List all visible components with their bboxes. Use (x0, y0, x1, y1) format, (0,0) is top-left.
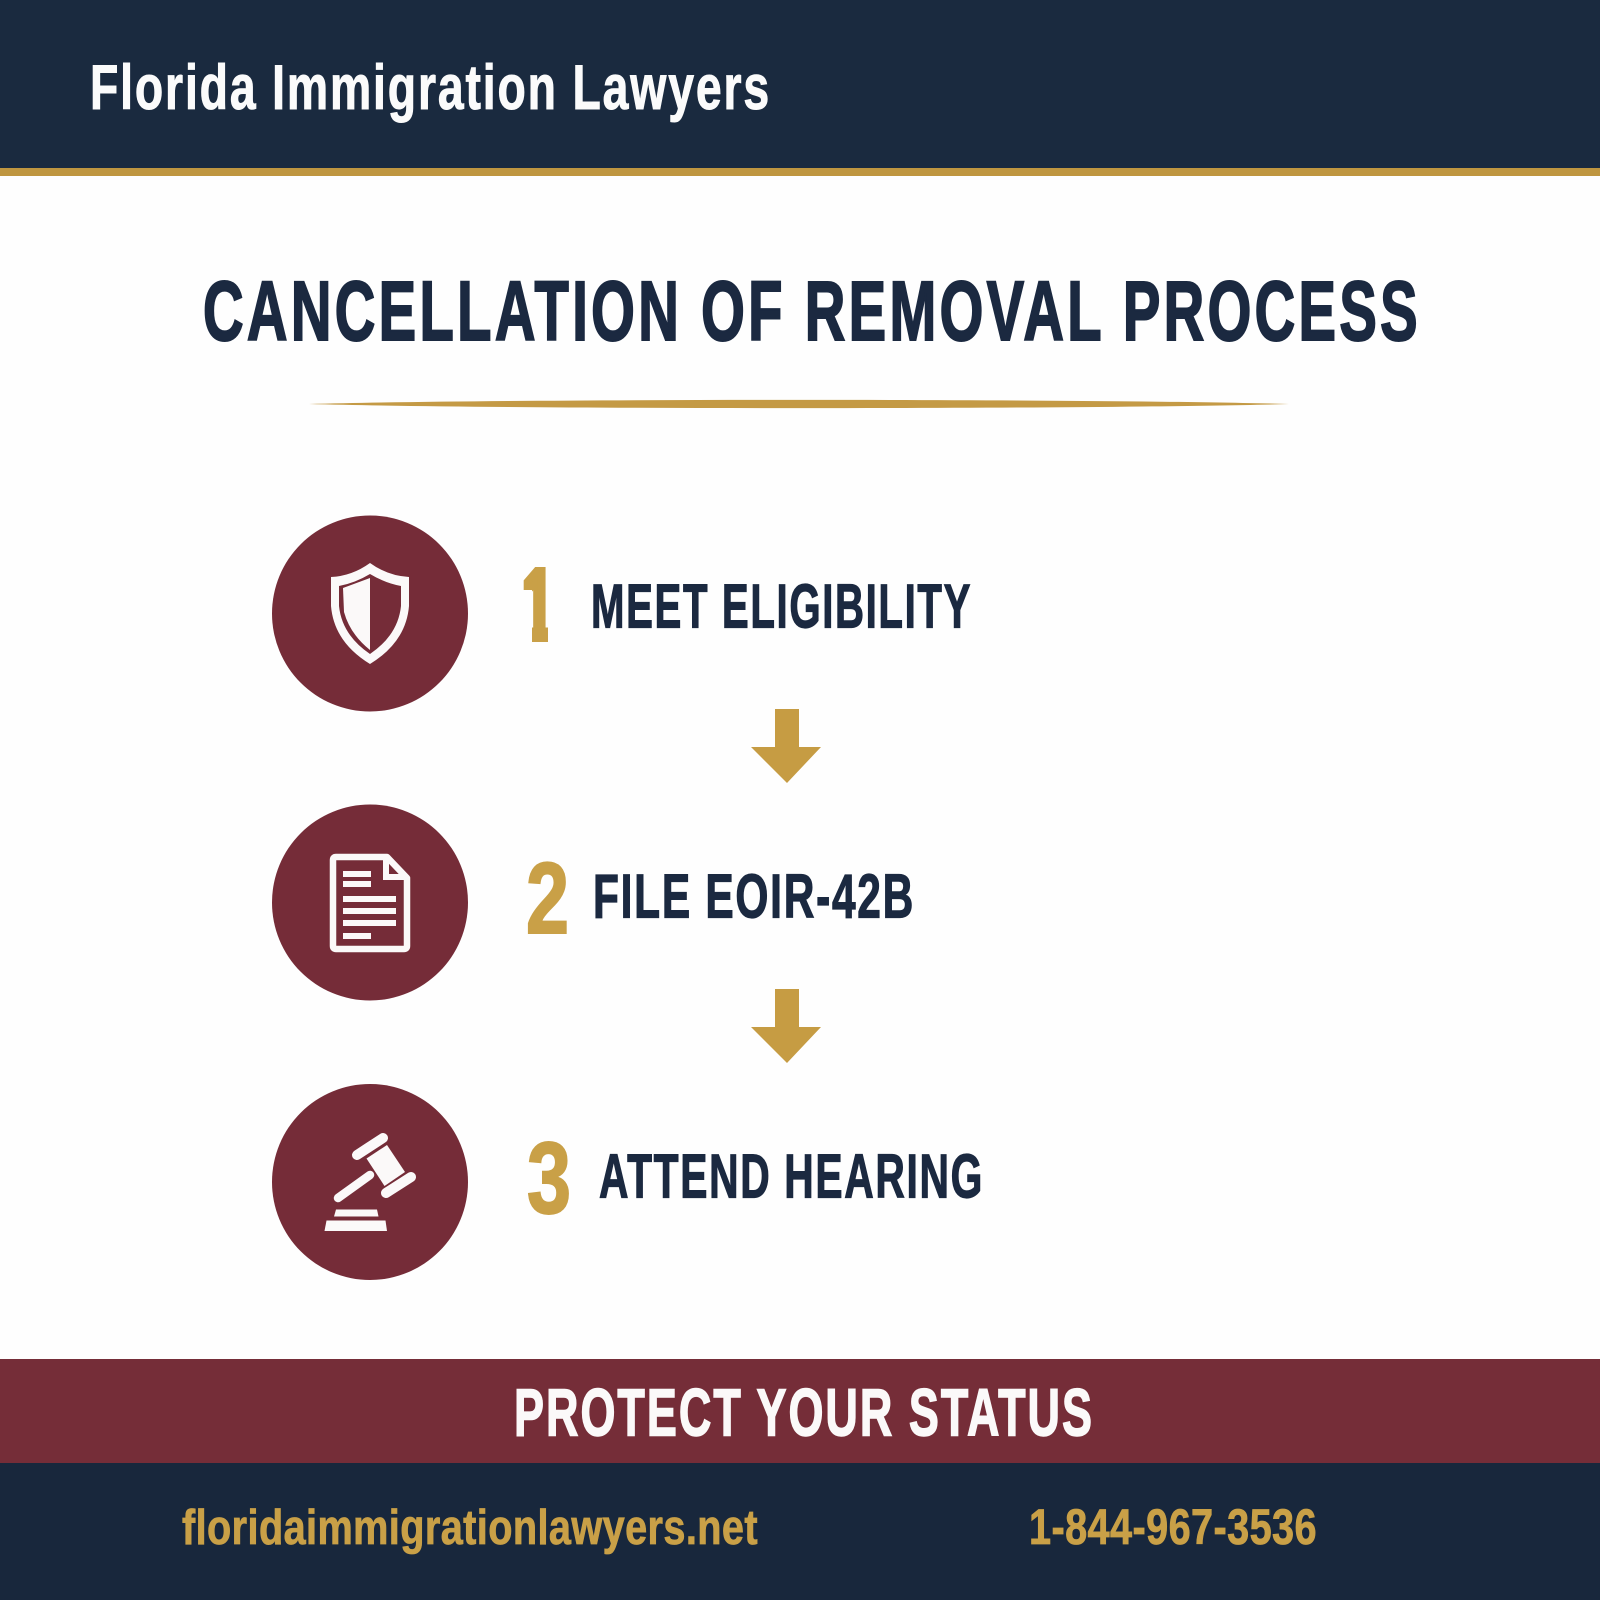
step 1 (272, 516, 972, 712)
step label 2: FILE EOIR-42B (593, 862, 915, 932)
icon: document (272, 804, 468, 1000)
icon: shield (272, 516, 468, 712)
step number 1: 1 (522, 549, 554, 664)
call to action text: PROTECT YOUR STATUS (514, 1376, 1094, 1450)
step number 3: 3 (527, 1123, 571, 1235)
header band (0, 0, 1600, 176)
icon: gavel (272, 1084, 468, 1280)
title underline (309, 400, 1289, 408)
step 3 (272, 1084, 984, 1280)
step number 2: 2 (526, 843, 569, 955)
brand name: Florida Immigration Lawyers (90, 53, 771, 123)
step 2 (272, 804, 915, 1000)
step label 3: ATTEND HEARING (599, 1142, 984, 1212)
footer band (0, 1463, 1600, 1600)
step label 1: MEET ELIGIBILITY (591, 572, 972, 642)
arrow 1 (751, 709, 821, 783)
call to action band (0, 1359, 1600, 1463)
website: floridaimmigrationlawyers.net (182, 1501, 758, 1555)
phone number: 1-844-967-3536 (1029, 1499, 1317, 1555)
arrow 2 (751, 989, 821, 1063)
